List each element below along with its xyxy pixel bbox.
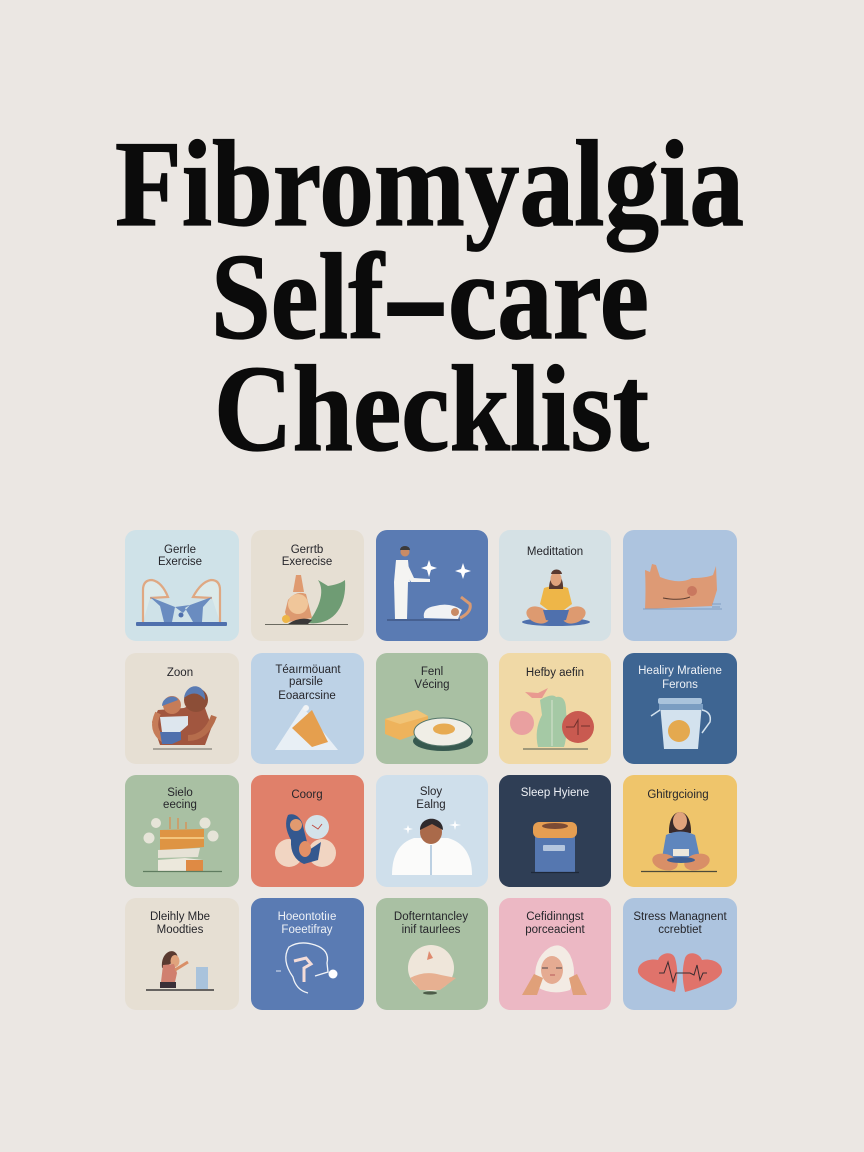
card: daily mobility: Dleihly Mbe: [150, 911, 210, 923]
card: stacked food: eecing: [163, 799, 197, 811]
card: sleep eating: Ealng: [416, 799, 446, 811]
card: triple line: [251, 653, 364, 764]
panel: checklist grid: [125, 530, 737, 1010]
card: pink portrait: porceacient: [525, 924, 586, 936]
title: Fibromyalgia: [115, 115, 744, 252]
card: stress management: Stress Managnent: [633, 911, 727, 923]
card: zoon: [125, 653, 239, 764]
card: triple line: Eoaarcsine: [278, 690, 336, 702]
card: triple line: parsile: [289, 676, 323, 688]
icon: resting body: [643, 564, 722, 609]
card: yellow meditating: [623, 775, 737, 887]
card: resting figure: [623, 530, 737, 641]
title: [115, 115, 744, 477]
card: gentle exercise 2: Gerrtb: [291, 544, 323, 556]
icon: head outline: [276, 943, 338, 993]
card: inflammation: inif taurlees: [402, 924, 461, 936]
icon: seated woman: [641, 812, 717, 873]
icon: belly circle: [408, 945, 456, 995]
title: Checklist: [214, 340, 649, 477]
card: gentle exercise 2: Exerecise: [282, 556, 332, 568]
card: healthy eating: [499, 653, 611, 764]
card: meditation: Medittation: [527, 546, 583, 558]
icon: standing person and reclining person: [387, 546, 471, 620]
card: hormone therapy: [251, 898, 364, 1010]
card: hormone therapy: Hoeontotiıe: [278, 911, 336, 923]
icon: plants and badge: [510, 688, 594, 749]
icon: bed box: [531, 822, 579, 872]
card: healthy eating: Hefby aefin: [526, 667, 584, 679]
icon: split heart and pulse: [638, 953, 722, 992]
icon: person and leaf: [265, 575, 348, 624]
card: yellow meditating: Ghitrgcioing: [647, 789, 709, 801]
icon: figures and thought bubble: [275, 814, 336, 867]
card: food: Fenl: [421, 666, 443, 678]
card: daily mobility: [125, 898, 239, 1010]
card: pink portrait: [499, 898, 611, 1010]
card: inflammation: Dofterntancley: [394, 911, 468, 923]
card: food: [376, 653, 488, 764]
card: gentle exercise 1: Gerrle: [164, 544, 196, 556]
title: care: [448, 228, 649, 365]
title: Self: [211, 228, 386, 365]
card: sleep eating: [376, 775, 488, 887]
card: hormone therapy: Foeetifray: [281, 924, 333, 936]
card: sleep eating: Sloy: [420, 786, 442, 798]
icon: exercise bands: [136, 580, 227, 626]
card: stacked food: Sielo: [167, 787, 193, 799]
icon: food on a cloth: [275, 705, 338, 750]
card: meditation: [499, 530, 611, 641]
card: stacked food: [125, 775, 239, 887]
card: food: Vécing: [414, 679, 450, 691]
icon: meditating person: [522, 570, 590, 627]
card: inflammation: [376, 898, 488, 1010]
card: pink portrait: Cefidinngst: [526, 911, 585, 923]
card: stress management: [623, 898, 737, 1010]
card: gentle exercise 2: [251, 530, 364, 641]
card: stress management: ccrebtiet: [658, 924, 703, 936]
card: coping: [251, 775, 364, 887]
card: blue caregiver: [376, 530, 488, 641]
card: daily mobility: Moodties: [157, 924, 204, 936]
icon: woman holding her head: [522, 945, 587, 995]
card: sleep hygiene: [499, 775, 611, 887]
card: zoon: Zoon: [167, 667, 193, 679]
card: healthy medicine: [623, 653, 737, 764]
card: sleep hygiene: Sleep Hyiene: [521, 787, 589, 799]
title: –: [389, 228, 442, 365]
icon: jar: [651, 698, 710, 749]
card: healthy medicine: Ferons: [662, 679, 698, 691]
icon: person with stethoscope: [392, 819, 472, 875]
icon: person at a water cooler: [146, 951, 214, 990]
icon: butter and plate: [385, 710, 473, 751]
icon: layered stack and bubbles: [143, 817, 222, 872]
card: gentle exercise 1: Exercise: [158, 556, 202, 568]
card: gentle exercise 1: [125, 530, 239, 641]
icon: embracing figures: [152, 686, 215, 749]
card: triple line: Téaırmöuant: [275, 664, 341, 676]
card: coping: Coorg: [291, 789, 323, 801]
card: healthy medicine: Healiry Mratiene: [638, 665, 722, 677]
